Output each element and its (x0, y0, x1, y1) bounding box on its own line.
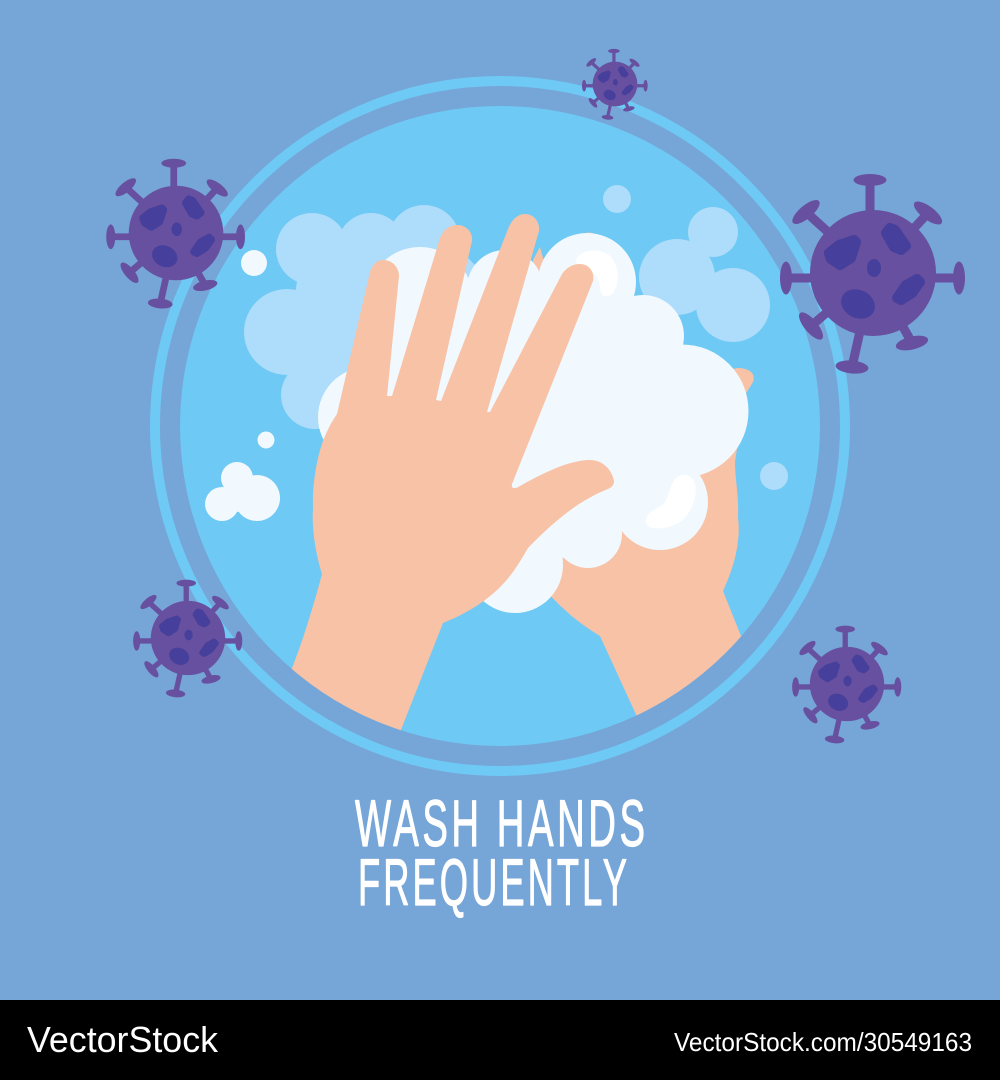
foam highlight: bottom (646, 475, 696, 528)
footer bar (0, 1000, 1000, 1080)
front hand (270, 214, 614, 745)
blue disc (180, 106, 820, 746)
outer ring (155, 81, 845, 771)
footer image id: VectorStock.com/30549163 (674, 1027, 972, 1057)
footer brand: VectorStock (27, 1019, 219, 1060)
slogan line 2: FREQUENTLY (358, 847, 627, 920)
virus: bottom right (792, 626, 901, 744)
small bubble: top (603, 185, 631, 213)
background foam: left cloud (244, 205, 480, 429)
virus: bottom left (133, 580, 242, 698)
virus: large right (780, 174, 965, 375)
white bubbles and small cloud (205, 250, 280, 521)
virus: top left (106, 159, 245, 309)
slogan line 1: WASH HANDS (355, 787, 645, 861)
back hand (530, 232, 760, 745)
foam highlight: top (576, 250, 618, 296)
small bubble: right (760, 462, 788, 490)
virus: top (582, 49, 648, 120)
main white soap foam (318, 233, 748, 613)
background foam: right cloud (639, 207, 770, 342)
slogan (355, 787, 645, 920)
